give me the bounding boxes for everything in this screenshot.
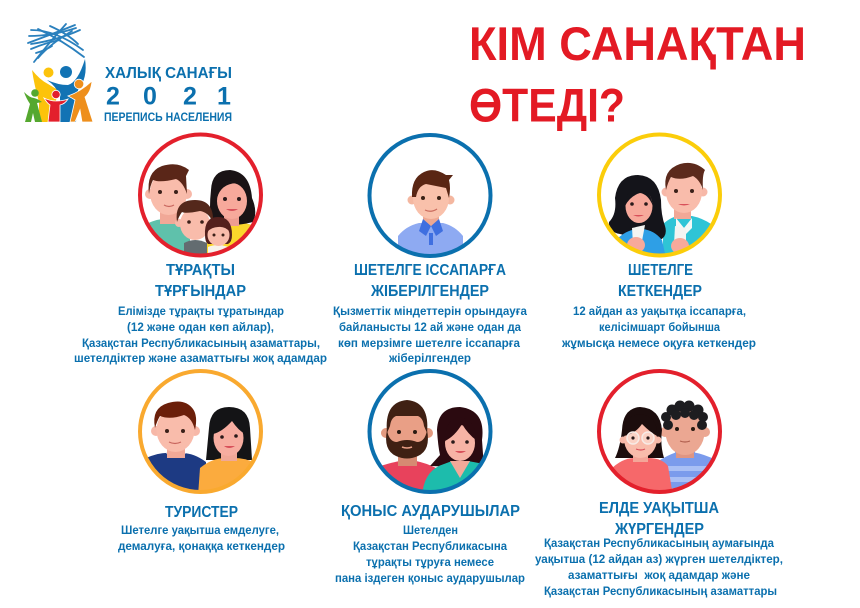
text block: шетелдіктер және азаматтығы жоқ адамдар	[74, 351, 327, 365]
text block: жіберілгендер	[388, 351, 471, 365]
heading: ЕЛДЕ УАҚЫТША	[599, 500, 719, 517]
panel: migrants	[335, 371, 525, 585]
panel: gone abroad	[561, 134, 756, 350]
text block: пана іздеген қоныс аударушылар	[335, 571, 525, 585]
icon: green child	[24, 89, 42, 122]
text block: Елімізде тұрақты тұратындар	[118, 304, 284, 318]
text block: байланысты 12 ай және одан да	[339, 320, 521, 334]
icon: family of four	[140, 134, 261, 258]
text block: Қазақстан Республикасының аумағында	[544, 536, 774, 550]
text block	[74, 304, 327, 365]
text block: Шетелге уақытша емделуге,	[121, 523, 279, 537]
heading: ШЕТЕЛГЕ	[628, 262, 693, 279]
heading: ТҰРҒЫНДАР	[155, 283, 246, 300]
text block: келісімшарт бойынша	[599, 320, 720, 334]
ring	[140, 371, 261, 492]
icon: tourist couple	[140, 371, 261, 496]
logo text: ХАЛЫҚ САНАҒЫ	[105, 65, 232, 82]
panel: permanent residents	[74, 134, 327, 365]
text block: жұмысқа немесе оқуға кеткендер	[561, 336, 756, 350]
icon: man in blue shirt	[370, 135, 490, 258]
heading: ШЕТЕЛГЕ ІССАПАРҒА	[354, 262, 506, 279]
text block	[561, 304, 756, 350]
heading: ЖҮРГЕНДЕР	[614, 521, 704, 538]
ring	[140, 134, 261, 256]
ring	[370, 371, 490, 492]
ring	[599, 371, 720, 492]
text block: уақытша (12 айдан аз) жүрген шетелдіктер,	[535, 552, 783, 566]
logo text: 1	[217, 82, 231, 110]
icon: migrant couple	[370, 371, 490, 496]
text block: демалуға, қонаққа кеткендер	[118, 539, 285, 553]
icon: red child	[44, 90, 68, 122]
heading	[599, 500, 719, 538]
heading	[155, 262, 246, 300]
icon: woven net	[28, 24, 84, 62]
title: КІМ САНАҚТАН	[469, 17, 806, 70]
text block: Қазақстан Республикасына	[353, 539, 507, 553]
logo text: 2	[106, 82, 120, 110]
panel: tourists	[118, 371, 285, 553]
panel: sent on business trips abroad	[333, 135, 527, 365]
text block: 12 айдан аз уақытқа іссапарға,	[573, 304, 746, 318]
logo text: 2	[183, 82, 197, 110]
icon: orange child	[68, 79, 93, 122]
text block: тұрақты тұруға немесе	[366, 555, 494, 569]
icon: couple holding papers	[599, 134, 720, 258]
text block: Қазақстан Республикасының азаматтары,	[82, 336, 320, 350]
text block	[335, 523, 525, 585]
logo text: ПЕРЕПИСЬ НАСЕЛЕНИЯ	[104, 110, 232, 124]
title	[469, 17, 806, 132]
title: ӨТЕДІ?	[469, 78, 625, 132]
heading: ТҰРАҚТЫ	[166, 262, 235, 279]
icon: woman with glasses and curly-haired man	[599, 371, 720, 496]
heading: ТУРИСТЕР	[165, 504, 238, 521]
panel: temporarily present	[535, 371, 783, 598]
text block: Қазақстан Республикасының азаматтары	[544, 584, 777, 598]
text block	[333, 304, 527, 365]
logo text	[104, 65, 232, 124]
ring	[599, 134, 720, 256]
logo: census 2021	[24, 24, 232, 124]
heading: ҚОНЫС АУДАРУШЫЛАР	[341, 503, 520, 520]
text block	[535, 536, 783, 598]
text block: көп мерзімге шетелге іссапарға	[338, 336, 520, 350]
icon: yellow adult	[32, 68, 58, 122]
text block: азаматтығы жоқ адамдар және	[568, 568, 750, 582]
ring	[370, 135, 490, 256]
heading	[354, 262, 506, 300]
logo text: 0	[143, 82, 157, 110]
icon: blue adult	[47, 59, 86, 122]
text block: Қызметтік міндеттерін орындауға	[333, 304, 527, 318]
heading	[618, 262, 702, 300]
text block	[118, 523, 285, 553]
heading: ЖІБЕРІЛГЕНДЕР	[370, 283, 489, 300]
heading: КЕТКЕНДЕР	[618, 283, 702, 300]
text block: Шетелден	[403, 523, 458, 537]
text block: (12 және одан көп айлар),	[127, 320, 274, 334]
